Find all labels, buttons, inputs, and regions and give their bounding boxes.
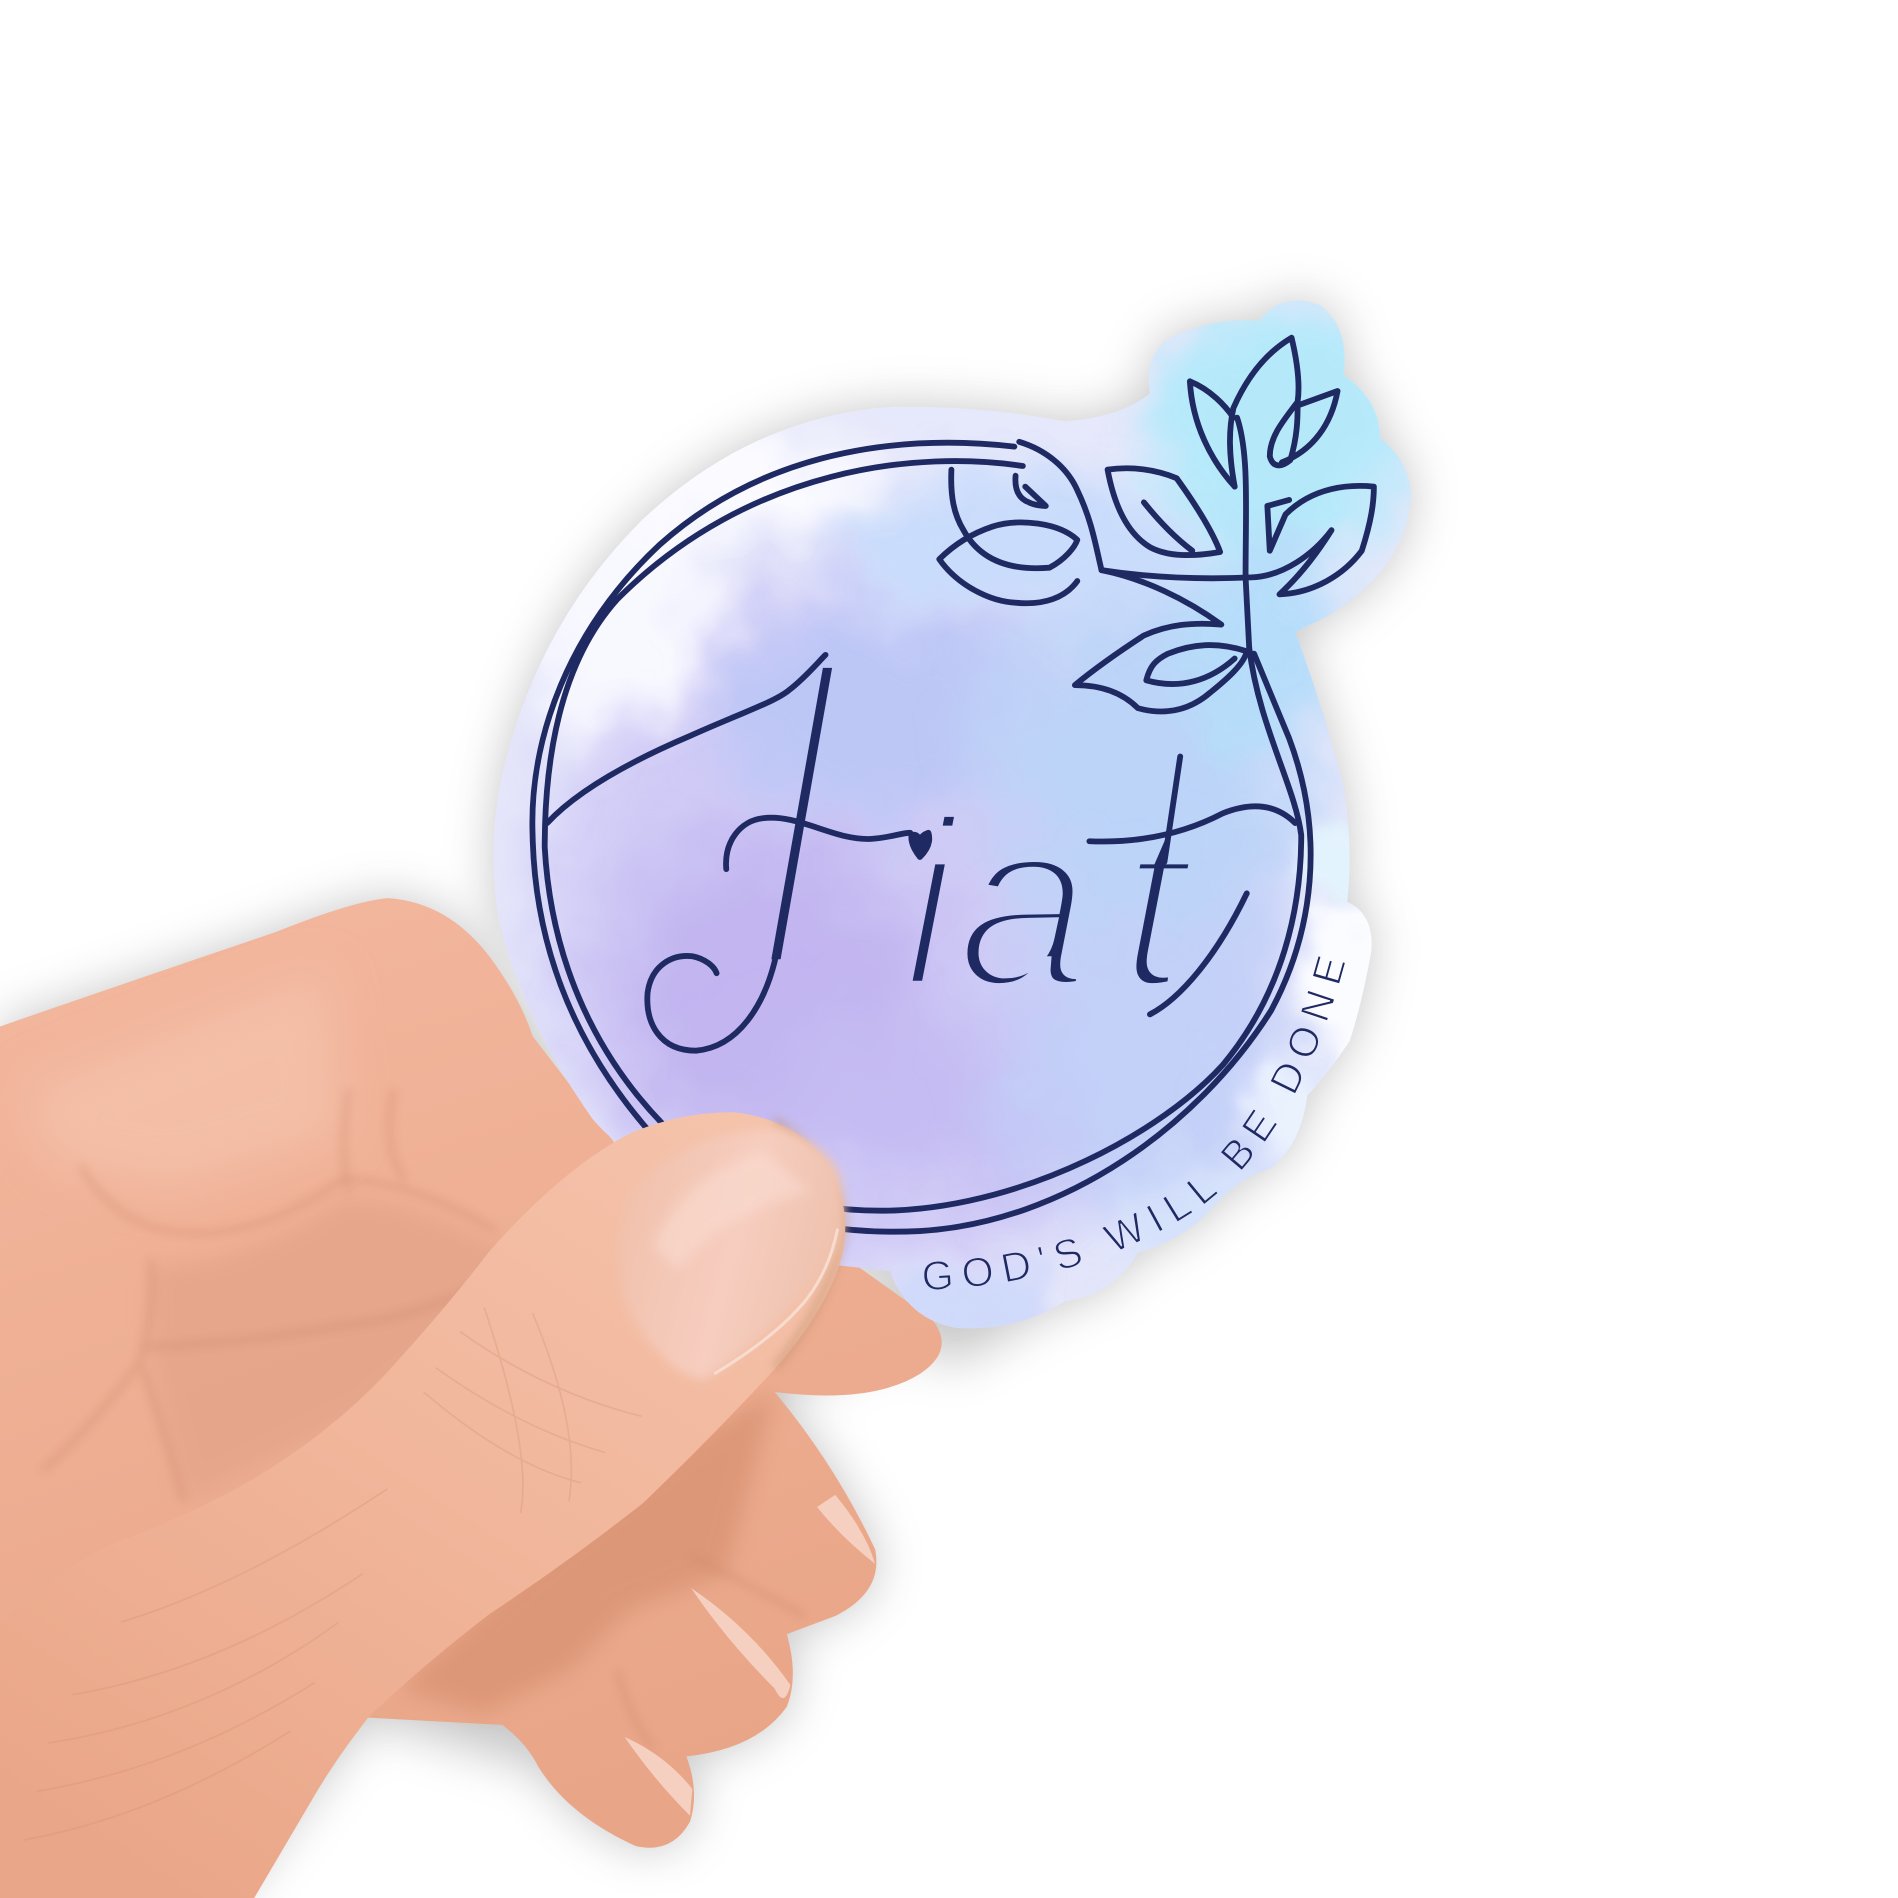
panel: die-cut Fiat sticker — [493, 300, 1411, 1338]
knuckle creases — [24, 1307, 642, 1840]
thumb tip rim — [775, 1120, 844, 1368]
finger knuckle highlight — [24, 968, 345, 1192]
main stem and branch — [1237, 418, 1249, 648]
sticker watercolor background — [460, 266, 1453, 1356]
lower finger shading — [399, 1392, 775, 1713]
finger fold lines — [42, 1089, 805, 1749]
flower leaves — [1019, 442, 1102, 570]
illustration: hand holding Fiat sticker — [0, 280, 1433, 1898]
wreath rings and leaf line art — [532, 338, 1374, 1232]
nail gloss — [654, 1150, 811, 1271]
hand: back fingers and palm — [0, 898, 942, 1898]
fingernails — [625, 1495, 875, 1816]
outer ring — [532, 443, 1311, 1232]
word: Fiat — [705, 530, 1196, 1087]
drop shadows — [0, 300, 1411, 1898]
lower leaf — [1075, 570, 1247, 711]
palm hollow shading — [151, 1198, 557, 1501]
word: Fiat: i — [902, 769, 962, 1039]
thumbnail — [619, 1129, 843, 1380]
word: Fiat: t — [1120, 769, 1196, 1039]
word: Fiat: F — [705, 530, 1027, 1087]
hand: thumb — [0, 1112, 845, 1898]
left leaf — [1108, 468, 1220, 555]
inner ring — [545, 461, 1301, 1211]
caption: God's will be done: GOD'S WILL BE DONE — [924, 956, 1345, 1290]
Fiat swashes — [547, 655, 1295, 1051]
word: Fiat: a — [956, 769, 1091, 1039]
nail edge line — [714, 1229, 838, 1374]
top leaves — [1230, 338, 1338, 487]
